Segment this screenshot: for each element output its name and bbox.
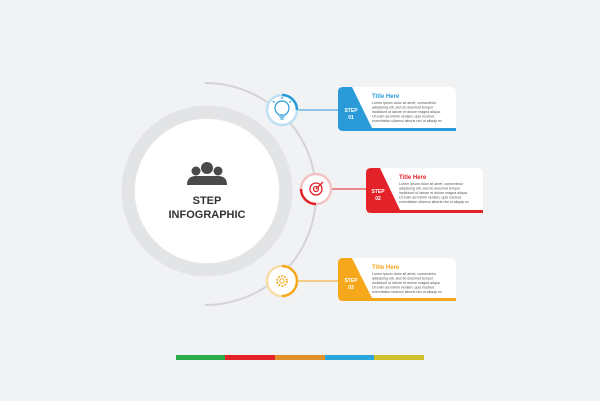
step 03 card: exercitation ullamco laboris nisi ut aliquip ex	[372, 290, 442, 294]
step 01 card: Ut enim ad minim veniam, quis nostrud	[372, 114, 434, 118]
step 02 node	[301, 174, 366, 204]
center circle: INFOGRAPHIC	[168, 209, 246, 221]
step 03 card: incididunt ut labore et dolore magna aliqua.	[372, 281, 441, 285]
outer arc	[205, 83, 316, 305]
step 02 card: adipiscing elit, sed do eiusmod tempor	[399, 186, 461, 190]
step 03 card: Ut enim ad minim veniam, quis nostrud	[372, 286, 434, 290]
color bar	[176, 355, 424, 360]
step 03 card: Title Here	[372, 265, 400, 271]
step 03 card: adipiscing elit, sed do eiusmod tempor	[372, 276, 434, 280]
step 03 card: STEP	[344, 278, 358, 284]
step 02 card	[366, 168, 483, 213]
step 01 card: exercitation ullamco laboris nisi ut aliquip ex	[372, 119, 442, 123]
step 01 card: Title Here	[372, 94, 400, 100]
step 01 node	[267, 95, 338, 125]
step 02 card: STEP	[371, 189, 385, 195]
step 03 card: 03	[348, 285, 354, 291]
step 03 node	[267, 266, 338, 296]
step 03 card: Lorem ipsum dolor sit amet, consectetur	[372, 272, 437, 276]
step 02 card: 02	[375, 196, 381, 202]
center circle	[128, 112, 286, 270]
step 01 card: adipiscing elit, sed do eiusmod tempor	[372, 106, 434, 110]
icon: people	[187, 162, 227, 185]
step 01 card: Lorem ipsum dolor sit amet, consectetur	[372, 101, 437, 105]
step 01 card: incididunt ut labore et dolore magna aliqua.	[372, 110, 441, 114]
step 01 card	[338, 87, 456, 131]
step 02 card: incididunt ut labore et dolore magna aliqua.	[399, 191, 468, 195]
heading: step infographic: STEP	[193, 195, 221, 207]
step 01 card: STEP	[344, 108, 358, 114]
step 02 card: Lorem ipsum dolor sit amet, consectetur	[399, 182, 464, 186]
step 02 card: Title Here	[399, 175, 427, 181]
step 03 card	[338, 258, 456, 301]
step 02 card: Ut enim ad minim veniam, quis nostrud	[399, 196, 461, 200]
step 01 card: 01	[348, 115, 354, 121]
step 02 card: exercitation ullamco laboris nisi ut aliquip ex	[399, 200, 469, 204]
